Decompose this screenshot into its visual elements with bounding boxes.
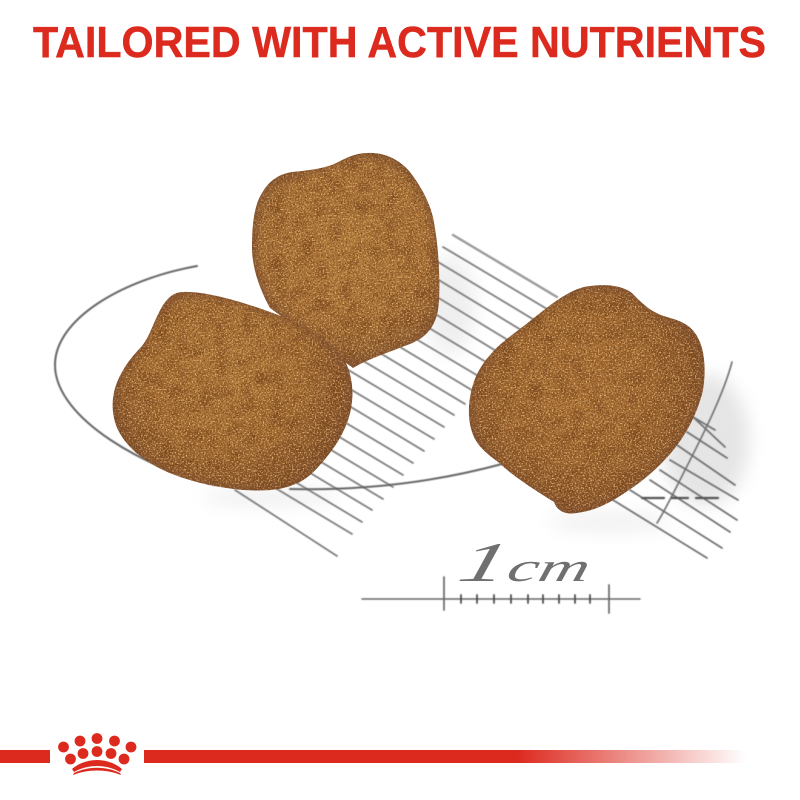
footer bar right: [144, 750, 746, 763]
kibble: left: [113, 292, 352, 490]
pencil ellipse around kibbles: [55, 266, 502, 489]
kibble: right: [469, 285, 705, 514]
scale ruler: [362, 577, 640, 613]
kibble: top: [252, 153, 439, 368]
handwritten scale label: 1cm: [453, 532, 599, 594]
pencil hatching behind kibbles: [235, 235, 557, 556]
footer bar left: [0, 750, 50, 763]
title: TAILORED WITH ACTIVE NUTRIENTS: [33, 18, 766, 67]
logo: crown: [58, 733, 136, 775]
soft shadows under the kibbles: [200, 255, 749, 532]
pencil hatching right of third kibble: [613, 362, 738, 558]
